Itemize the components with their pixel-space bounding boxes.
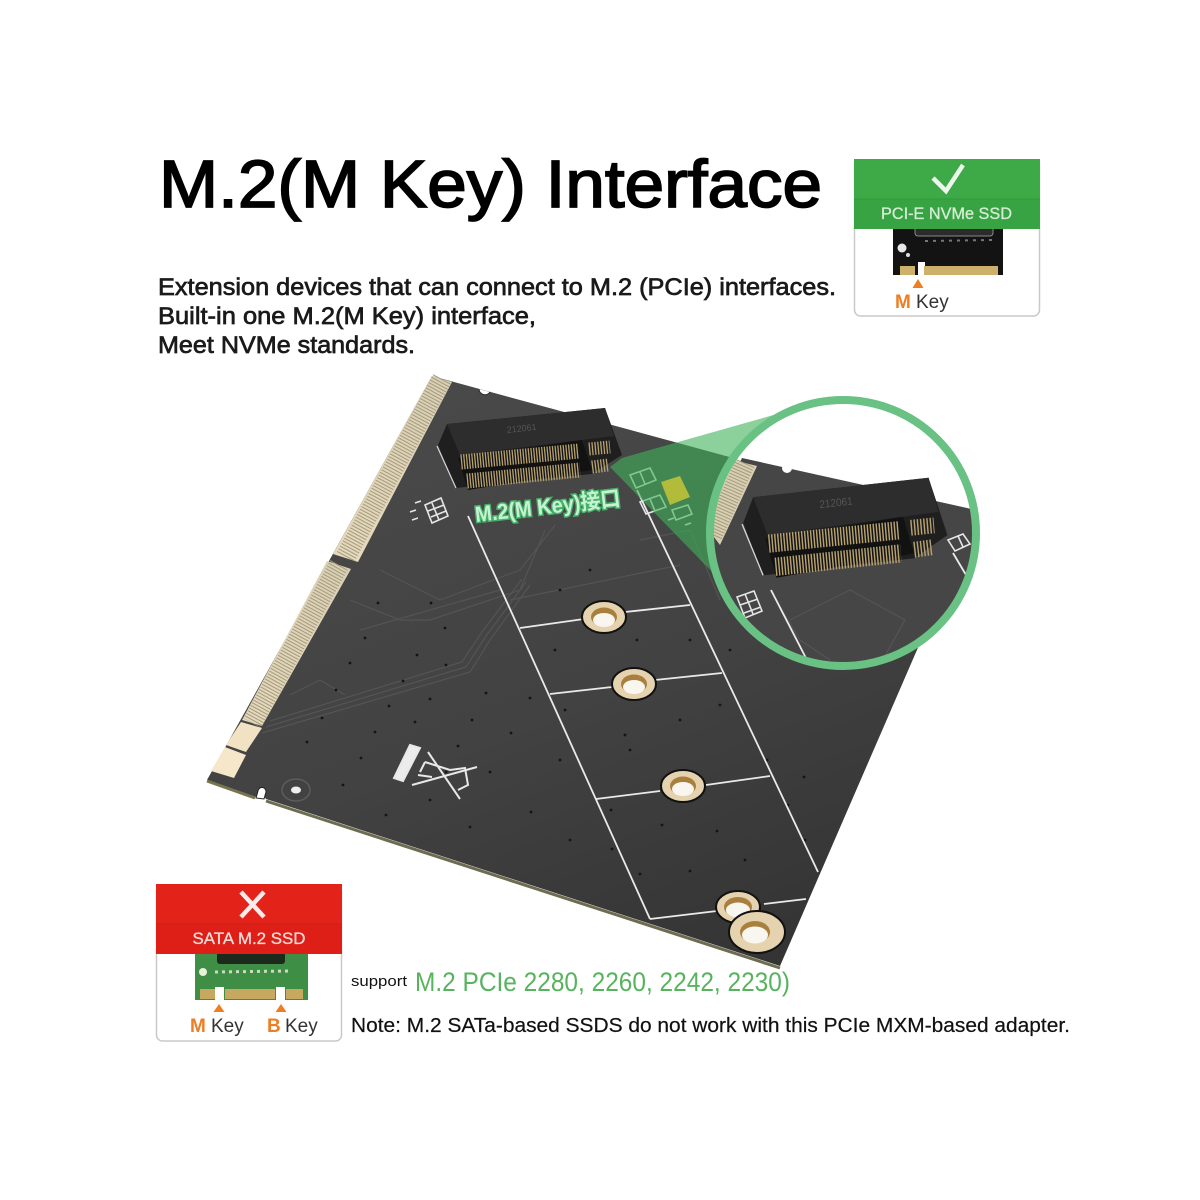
via dots — [306, 569, 806, 875]
M key marker — [895, 279, 949, 313]
inset pads — [737, 591, 762, 618]
M key marker — [190, 1004, 244, 1037]
yellow capacitor — [661, 476, 690, 510]
product photo: M.2 adapter board — [207, 376, 972, 968]
inset slot lines — [771, 590, 808, 662]
icon: cross mark — [241, 892, 264, 917]
M key marker: Key — [211, 1016, 244, 1037]
M key marker: Key — [916, 292, 949, 313]
icon: WEEE disposal mark — [394, 745, 477, 799]
compatibility note: Note: M.2 SATa-based SSDS do not work with this PCIe MXM-based adapter. — [351, 1015, 1070, 1037]
surface-mount pads — [410, 468, 692, 525]
description text: Built-in one M.2(M Key) interface, — [158, 303, 536, 330]
description text: Meet NVMe standards. — [158, 332, 415, 359]
M key marker: M — [190, 1016, 206, 1037]
ground pad — [282, 779, 310, 801]
support label: support — [351, 973, 408, 990]
magnified circle inset — [706, 396, 980, 670]
title: M.2(M Key) Interface — [159, 147, 822, 222]
inset connector — [742, 478, 947, 578]
icon: SATA SSD board with M and B keys — [195, 950, 308, 1000]
slot outline markings — [468, 490, 818, 919]
M.2 connector — [437, 408, 622, 490]
B key marker — [267, 1004, 318, 1037]
circuit traces — [262, 525, 720, 733]
badge: SATA M.2 SSD not supported — [156, 884, 342, 1041]
zoom cone highlight — [610, 408, 798, 578]
description text: Extension devices that can connect to M.2 (PCIe) interfaces. — [158, 274, 836, 301]
M key marker: M — [895, 292, 911, 313]
icon: check mark — [933, 165, 963, 191]
inset board — [714, 458, 972, 662]
B key marker: B — [267, 1016, 281, 1037]
mounting holes — [582, 601, 785, 953]
board edges — [207, 389, 780, 968]
B key marker: Key — [285, 1016, 318, 1037]
gold edge fingers — [211, 376, 452, 778]
description text — [158, 274, 836, 359]
icon: NVMe SSD board with M key — [893, 226, 1003, 275]
badge: PCI-E NVMe SSD supported — [854, 159, 1040, 316]
inset traces — [770, 590, 905, 665]
badge label: SATA M.2 SSD — [192, 929, 306, 948]
connector label: M.2(M Key)接口 — [474, 486, 622, 527]
board body — [207, 376, 972, 966]
inset gold edge — [714, 460, 757, 545]
badge label: PCI-E NVMe SSD — [881, 204, 1012, 223]
supported sizes: M.2 PCIe 2280, 2260, 2242, 2230) — [415, 967, 790, 997]
